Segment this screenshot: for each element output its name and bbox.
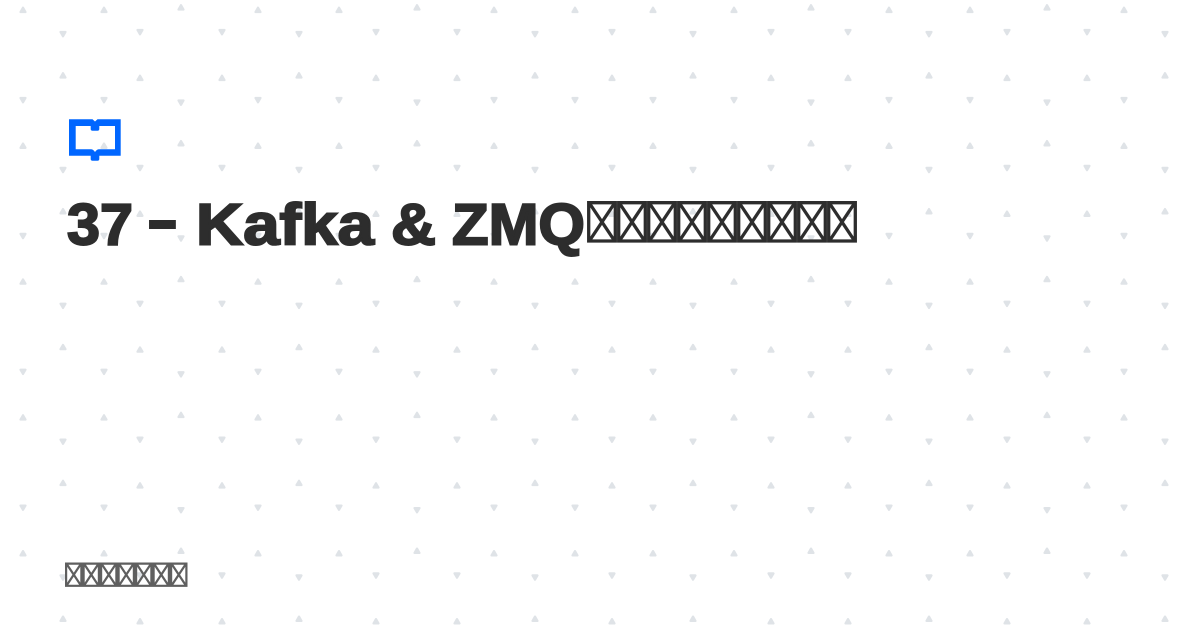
title: [67, 188, 855, 258]
title: -: [147, 188, 178, 252]
title: Kafka: [196, 192, 375, 258]
title: 37: [67, 192, 133, 258]
title: &: [391, 192, 436, 258]
title: ZMQ: [452, 192, 585, 258]
icon: open book: [69, 119, 121, 161]
footer label: [66, 564, 186, 586]
